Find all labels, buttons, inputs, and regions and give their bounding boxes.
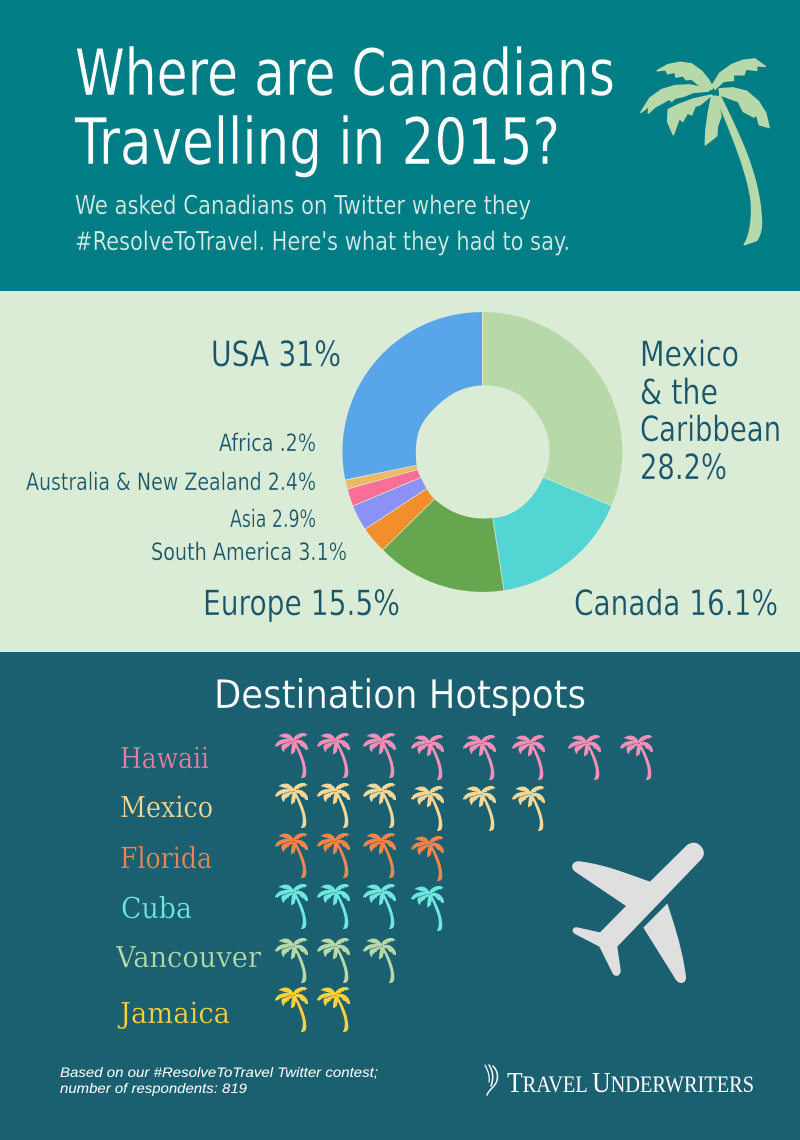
slice: Asia — [353, 452, 482, 529]
label: Australia and New Zealand: Australia & New Zealand 2.4% — [26, 468, 316, 496]
row: Jamaica: Jamaica — [117, 996, 230, 1030]
footnote: Based on our #ResolveToTravel Twitter contest; — [60, 1065, 378, 1080]
icon: airplane — [572, 843, 704, 983]
footnote — [60, 1065, 378, 1096]
icon: large palm tree — [641, 59, 769, 245]
slice: Mexico and the Caribbean — [482, 312, 623, 506]
slice: Europe — [383, 452, 504, 592]
subtitle: We asked Canadians on Twitter where they — [75, 191, 531, 221]
title: Where are Canadians — [75, 37, 615, 111]
heading: Destination Hotspots — [214, 673, 586, 718]
row: Vancouver — [115, 938, 396, 983]
row: Cuba: Cuba — [121, 891, 192, 925]
chart labels — [26, 335, 781, 624]
panel: header — [0, 0, 800, 291]
label: South America: South America 3.1% — [151, 538, 347, 566]
row: Jamaica — [117, 987, 350, 1032]
label: Mexico and the Caribbean: 28.2% — [640, 448, 727, 488]
slice: Australia and New Zealand — [347, 452, 482, 506]
slice: Canada — [482, 452, 612, 591]
row: Hawaii — [120, 733, 653, 780]
slice: USA — [342, 312, 482, 480]
label: Asia: Asia 2.9% — [230, 505, 316, 533]
panel: destination hotspots — [0, 652, 800, 1140]
row: Cuba — [121, 884, 444, 931]
row: Mexico — [120, 783, 545, 831]
row: Hawaii: Hawaii — [120, 741, 209, 775]
title — [74, 37, 615, 180]
footnote: number of respondents: 819 — [60, 1081, 248, 1096]
label: Europe: Europe 15.5% — [203, 584, 400, 624]
wordmark: TRAVEL UNDERWRITERS — [507, 1067, 754, 1099]
row: Florida — [120, 833, 444, 881]
title: Travelling in 2015? — [74, 106, 560, 180]
subtitle — [75, 191, 570, 257]
icon: quill — [485, 1065, 498, 1095]
label: Mexico and the Caribbean: Mexico — [640, 335, 739, 375]
logo: Travel Underwriters — [485, 1065, 754, 1099]
label: Mexico and the Caribbean: & the — [640, 373, 718, 413]
subtitle: #ResolveToTravel. Here's what they had to say. — [75, 227, 570, 257]
donut hole — [416, 385, 550, 519]
label: USA: USA 31% — [211, 335, 341, 375]
panel: destination donut chart — [0, 291, 800, 652]
row: Vancouver: Vancouver — [115, 940, 261, 974]
slice: Africa — [345, 452, 482, 489]
label: Mexico and the Caribbean — [640, 335, 781, 488]
row: Mexico: Mexico — [120, 790, 213, 824]
row: Florida: Florida — [120, 841, 212, 875]
donut chart — [342, 312, 623, 592]
label: Africa: Africa .2% — [219, 429, 316, 457]
slice: South America — [365, 452, 482, 550]
